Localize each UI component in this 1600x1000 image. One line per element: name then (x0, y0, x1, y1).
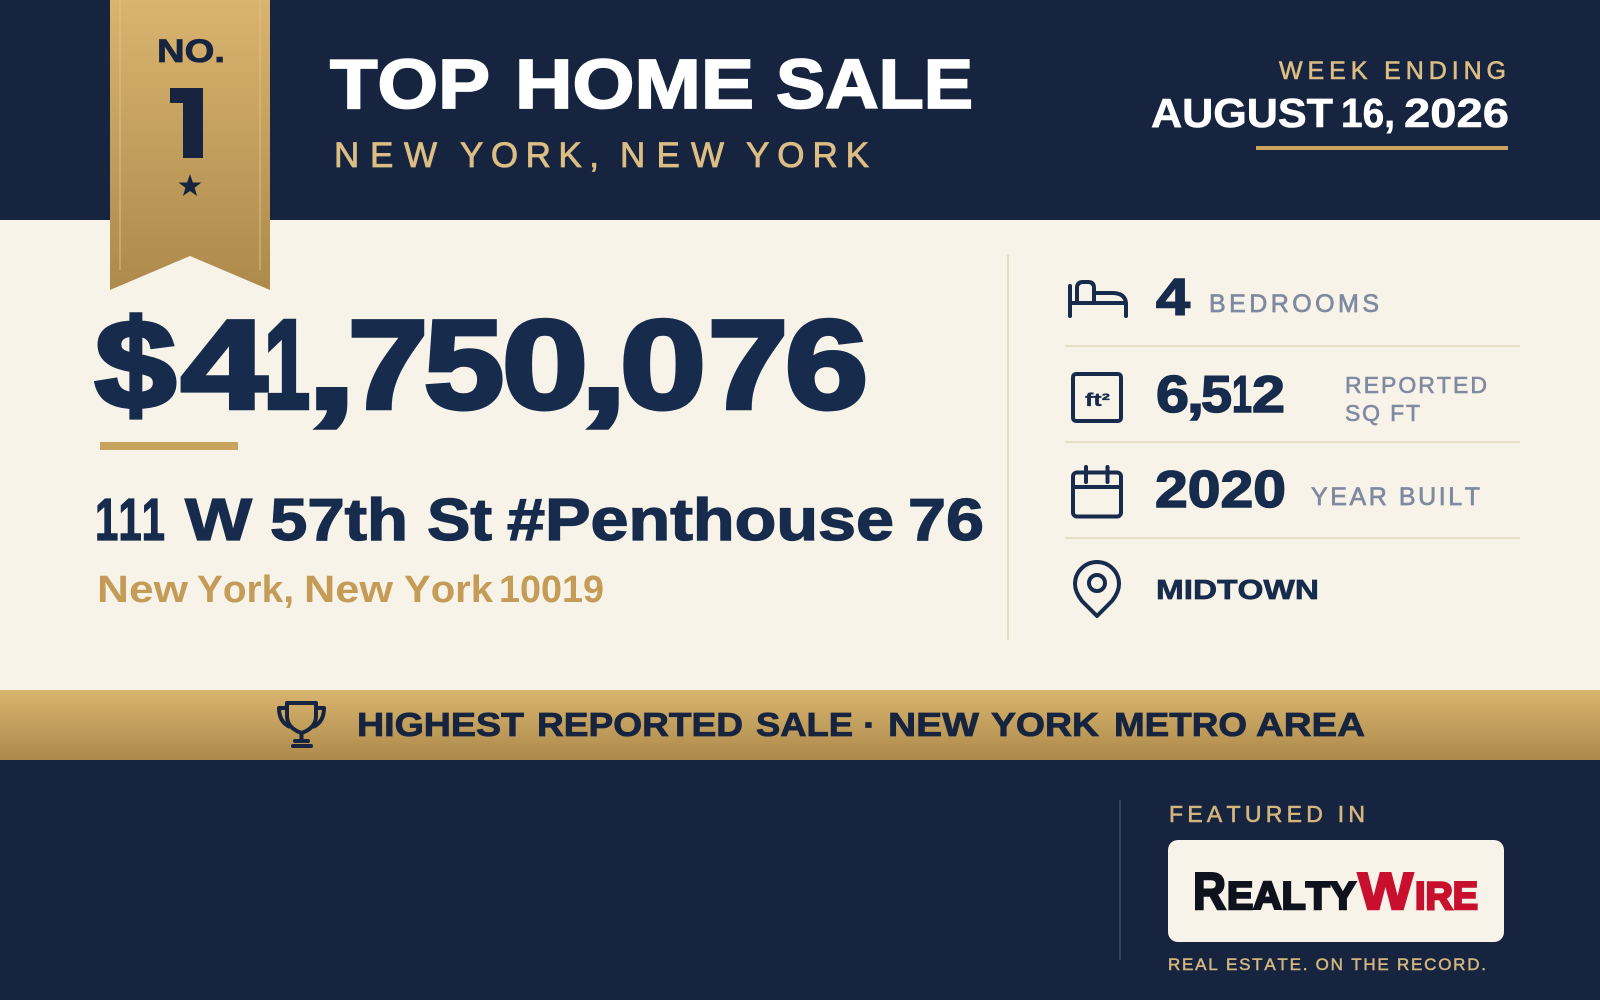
sale price: $ (95, 294, 176, 435)
bedrooms value: 4 (1156, 269, 1190, 327)
icon: trophy (279, 703, 324, 746)
ribbon badge (110, 0, 270, 290)
banner text: SALE (756, 706, 853, 743)
main cream panel (0, 220, 1600, 690)
stat: year built (1073, 461, 1480, 519)
week ending date block: AUGUST (1151, 90, 1333, 136)
ribbon star (178, 174, 202, 196)
city state zip: New (304, 569, 393, 611)
year label: YEAR BUILT (1311, 483, 1480, 511)
title: TOP (330, 45, 490, 123)
subtitle location: YORK (746, 136, 869, 175)
icon: map pin (1075, 562, 1119, 616)
sale price: 4 (181, 294, 267, 435)
square feet value: , (1187, 366, 1204, 424)
icon: bed (1070, 282, 1126, 316)
logo card: RealtyWire: IRE (1415, 875, 1478, 918)
title: SALE (776, 45, 973, 123)
logo card: RealtyWire: W (1358, 863, 1414, 921)
ribbon number 1 (170, 88, 203, 158)
banner text: HIGHEST (357, 706, 524, 743)
stat: bedrooms (1070, 269, 1379, 327)
footer divider (1119, 800, 1121, 960)
street address: #Penthouse (507, 487, 894, 553)
banner text: REPORTED (537, 706, 743, 743)
subtitle location: NEW (620, 136, 724, 175)
stat: square feet (1073, 366, 1487, 426)
week ending date block: 16, (1341, 90, 1395, 136)
banner text: NEW (888, 706, 980, 743)
stat: neighborhood (1075, 562, 1319, 616)
city state zip: 10019 (499, 569, 604, 611)
icon: calendar (1073, 467, 1121, 516)
neighborhood name: MIDTOWN (1156, 574, 1319, 605)
square feet value: 2 (1252, 366, 1285, 424)
logo card: RealtyWire (1168, 840, 1504, 942)
rule (1065, 345, 1520, 347)
subtitle location: NEW (334, 136, 437, 175)
street address: 76 (908, 487, 984, 553)
banner text: METRO (1114, 706, 1247, 743)
square feet label (1345, 372, 1487, 426)
price underline (100, 442, 238, 450)
week ending date block: WEEK ENDING (1279, 57, 1506, 85)
sale price: 0 (620, 294, 706, 435)
sale price: , (580, 294, 627, 435)
street address: W (185, 487, 252, 553)
banner text: · (863, 706, 876, 743)
sale price: 6 (785, 294, 868, 435)
sale price: 0 (502, 294, 588, 435)
week ending date block (1151, 57, 1509, 150)
square feet label: SQ FT (1345, 400, 1420, 426)
sale price: 1 (264, 294, 310, 435)
icon: ft2 square (1073, 374, 1121, 421)
banner text: YORK (991, 706, 1099, 743)
footer band (0, 760, 1600, 1000)
square feet label: REPORTED (1345, 372, 1487, 398)
street address: 111 (95, 487, 165, 553)
tagline: REAL ESTATE. ON THE RECORD. (1168, 955, 1486, 974)
street address: St (427, 487, 492, 553)
logo card: RealtyWire: R (1193, 863, 1226, 921)
ribbon label: No.: NO. (157, 33, 225, 69)
sale price: 5 (424, 294, 504, 435)
rule (1065, 441, 1520, 443)
square feet value: 1 (1232, 366, 1252, 424)
header band (0, 0, 1600, 220)
rule (1065, 537, 1520, 539)
street address: 57th (270, 487, 408, 553)
icon: ft2 square: ft² (1085, 390, 1110, 410)
vertical divider (1007, 255, 1009, 640)
banner text: AREA (1256, 706, 1365, 743)
square feet value: 5 (1201, 366, 1232, 424)
title: HOME (515, 45, 754, 123)
square feet value: 6 (1156, 366, 1189, 424)
featured in label: FEATURED IN (1169, 801, 1365, 827)
city state zip: York (404, 569, 494, 611)
city state zip: New (97, 569, 189, 611)
city state zip: York, (197, 569, 294, 611)
sale price: 7 (708, 294, 788, 435)
gold banner (0, 690, 1600, 760)
subtitle location: YORK, (460, 136, 599, 175)
sale price: 7 (348, 294, 428, 435)
logo card: RealtyWire: EALTY (1227, 875, 1356, 918)
year value: 2020 (1155, 461, 1286, 519)
sale price: , (307, 294, 356, 435)
week ending date block: 2026 (1404, 90, 1509, 136)
bedrooms label: BEDROOMS (1209, 290, 1379, 318)
